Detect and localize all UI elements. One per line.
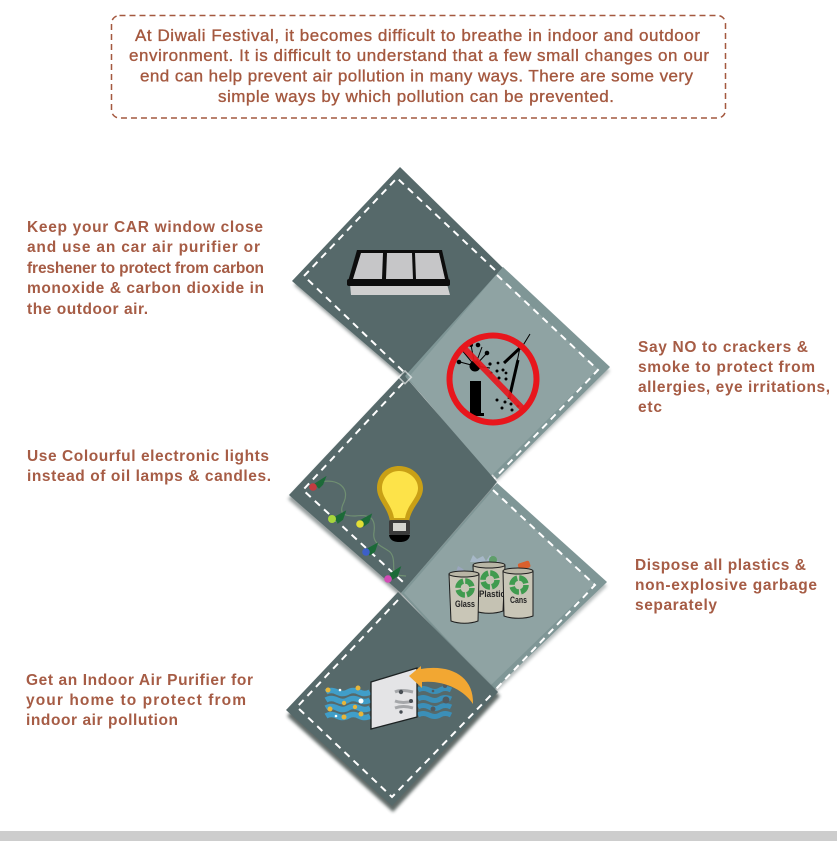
footer bar bbox=[0, 831, 837, 841]
panel: garbage diamond bbox=[401, 483, 607, 695]
text: garbage tip bbox=[635, 557, 817, 614]
zigzag diagram bbox=[286, 167, 610, 812]
text: car window tip: monoxide & carbon dioxide in bbox=[27, 280, 264, 297]
text: lights tip bbox=[27, 448, 271, 485]
text: crackers tip: allergies, eye irritations, bbox=[638, 379, 830, 396]
icon: recycling bins bbox=[449, 555, 533, 623]
text: indoor purifier tip: Get an Indoor Air Purifier for bbox=[26, 672, 253, 689]
intro callout bbox=[112, 16, 726, 118]
text: crackers tip: etc bbox=[638, 399, 662, 416]
icon: light bulb bbox=[377, 466, 423, 542]
text: garbage tip: non-explosive garbage bbox=[635, 577, 817, 594]
text: indoor purifier tip: indoor air pollution bbox=[26, 712, 178, 729]
text: car window tip bbox=[27, 219, 264, 318]
text: crackers tip bbox=[638, 339, 830, 416]
text: car window tip: Keep your CAR window close bbox=[27, 219, 263, 236]
intro callout: simple ways by which pollution can be prevented. bbox=[218, 87, 614, 106]
intro callout: At Diwali Festival, it becomes difficult to breathe in indoor and outdoor bbox=[135, 26, 700, 45]
text: garbage tip: Dispose all plastics & bbox=[635, 557, 806, 574]
panel: crackers diamond bbox=[405, 267, 610, 483]
text: indoor purifier tip: your home to protect from bbox=[26, 692, 246, 709]
intro callout: end can help prevent air pollution in many ways. There are some very bbox=[140, 66, 694, 86]
text: car window tip: and use an car air purifier or bbox=[27, 239, 260, 256]
text: car window tip: the outdoor air. bbox=[27, 301, 148, 318]
text: garbage tip: separately bbox=[635, 597, 717, 614]
bin: glass: Glass bbox=[455, 599, 475, 609]
text: lights tip: instead of oil lamps & candles. bbox=[27, 468, 271, 485]
text: car window tip: freshener to protect from carbon bbox=[27, 260, 264, 277]
bin: cans: Cans bbox=[510, 595, 527, 605]
bin: plastic: Plastic bbox=[479, 589, 505, 599]
text: crackers tip: Say NO to crackers & bbox=[638, 339, 808, 356]
text: crackers tip: smoke to protect from bbox=[638, 359, 815, 376]
panel: indoor purifier diamond bbox=[286, 592, 500, 812]
panel: lights diamond bbox=[288, 374, 497, 597]
text: indoor purifier tip bbox=[26, 672, 253, 729]
icon: no crackers sign bbox=[450, 334, 536, 422]
text: lights tip: Use Colourful electronic lights bbox=[27, 448, 269, 465]
icon: indoor air purifier bbox=[326, 666, 473, 729]
icon: string of electric lights bbox=[309, 479, 406, 583]
intro callout: environment. It is difficult to understand that a few small changes on our bbox=[129, 46, 709, 65]
corner notch bbox=[399, 371, 411, 384]
icon: car air filter bbox=[347, 250, 450, 295]
panel: car filter diamond bbox=[292, 167, 503, 381]
